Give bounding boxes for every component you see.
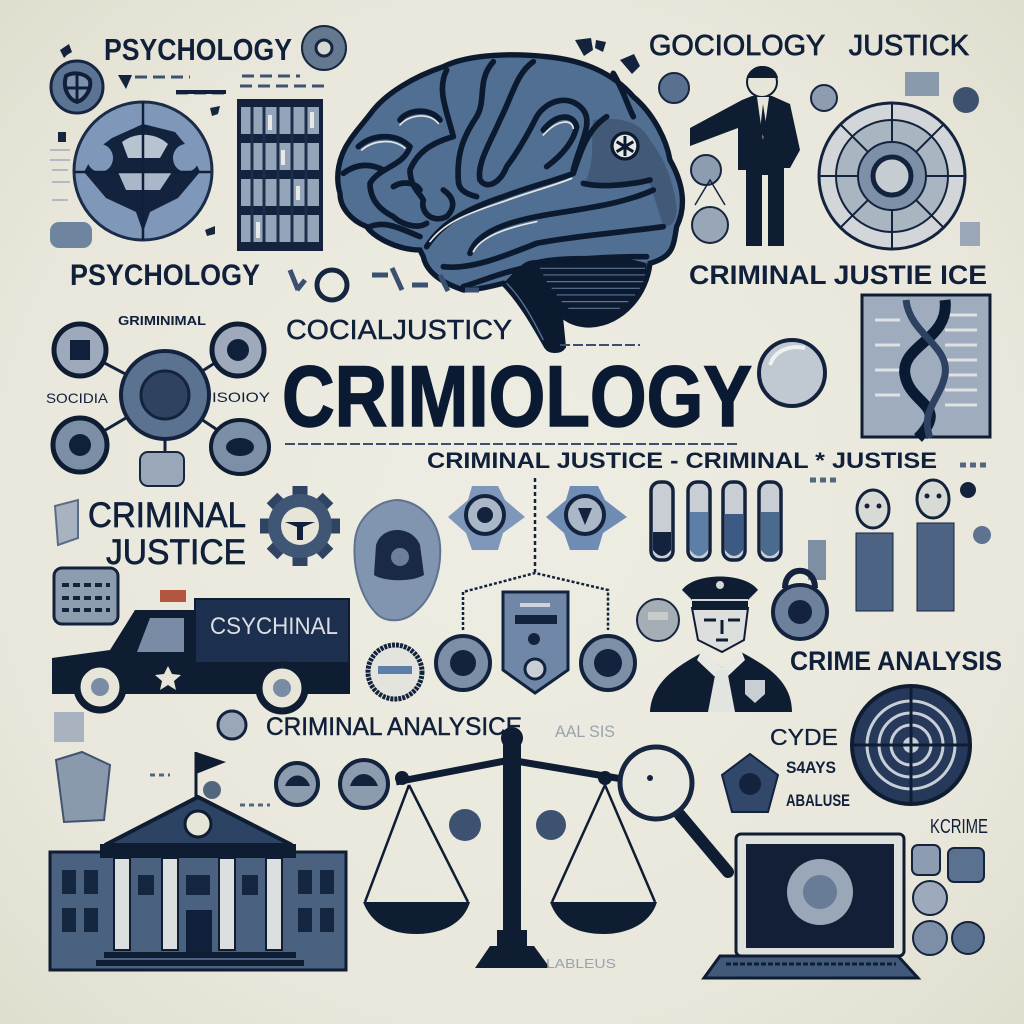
heading: crime analysis: CRIME ANALYSIS	[790, 646, 1002, 676]
icon: magnifying glass	[620, 747, 728, 872]
icon: magnifier lens right	[759, 340, 825, 406]
small icons middle top	[285, 268, 740, 444]
icon: fingerprint target	[852, 686, 970, 804]
icon: left document pile	[54, 711, 246, 822]
label: abuse: ABALUSE	[786, 791, 850, 810]
heading: criminal justice left: JUSTICE	[106, 533, 246, 572]
icon: cap shield	[354, 500, 440, 620]
diagram: social network hub: ISOIOY	[212, 389, 271, 405]
brain cerebellum	[503, 256, 647, 350]
icons: badge pair	[448, 478, 627, 572]
icon: police officer	[650, 576, 792, 712]
icon: dna report	[862, 295, 990, 438]
icon: case file left	[54, 568, 118, 624]
heading: criminal justice center: CRIMINAL JUSTICE - CRIMINAL * JUSTISE	[427, 448, 937, 473]
brain grooves	[343, 62, 663, 287]
heading: psychology top: PSYCHOLOGY	[104, 32, 292, 67]
icon: two busts on pillars	[856, 480, 954, 611]
network: shield with badges	[368, 573, 635, 699]
diagram: social network hub: SOCIDIA	[46, 390, 109, 406]
heading: psychology second: PSYCHOLOGY	[70, 259, 260, 292]
diagram: social network hub	[46, 313, 271, 486]
brain highlights	[362, 116, 573, 252]
icon: laptop	[704, 834, 918, 978]
icons: test tubes	[651, 482, 781, 560]
heading: social justice: COCIALJUSTICY	[286, 314, 512, 345]
heading: criminal justice left: CRIMINAL	[88, 496, 246, 535]
label: crime: KCRIME	[930, 816, 988, 838]
icon: police van	[52, 590, 350, 711]
title: CRIMIOLOGY	[282, 349, 752, 445]
small icons top right	[595, 40, 980, 246]
heading: criminal justice left	[88, 496, 246, 572]
icon: courthouse	[50, 752, 346, 970]
brain skull spot	[610, 131, 640, 161]
icon: radial web dial	[819, 103, 965, 249]
diagram: social network hub: GRIMINIMAL	[118, 313, 206, 328]
faint text: bottom: LABLEUS	[546, 956, 616, 971]
icons: circle pair center	[150, 760, 388, 808]
icon: pointing man	[690, 66, 800, 246]
icon: small shield left	[55, 500, 78, 545]
small icons right of tubes	[808, 465, 991, 580]
icon: shelf grid	[237, 99, 323, 251]
heading: criminal analysice: CRIMINAL ANALYSICE	[266, 713, 522, 741]
icon: padlock circle	[637, 571, 827, 641]
icon: compass circle	[74, 102, 212, 240]
icon: police badge	[722, 754, 778, 812]
faint text: analysis: AAL SIS	[555, 722, 615, 741]
icons: right column	[912, 845, 984, 955]
illustration: brain	[338, 55, 682, 350]
label: small scribble: S4AYS	[786, 758, 836, 777]
heading: sociology justice: GOCIOLOGY JUSTICK	[649, 30, 970, 62]
icon: police van: CSYCHINAL	[210, 613, 338, 640]
icon: gear	[260, 486, 340, 566]
label: cyber: CYDE	[770, 724, 838, 750]
icon: scales of justice	[363, 727, 657, 968]
brain darker lobe	[583, 119, 677, 227]
heading: criminal justice right: CRIMINAL JUSTIE ICE	[689, 260, 987, 290]
small icons top left	[50, 26, 593, 248]
